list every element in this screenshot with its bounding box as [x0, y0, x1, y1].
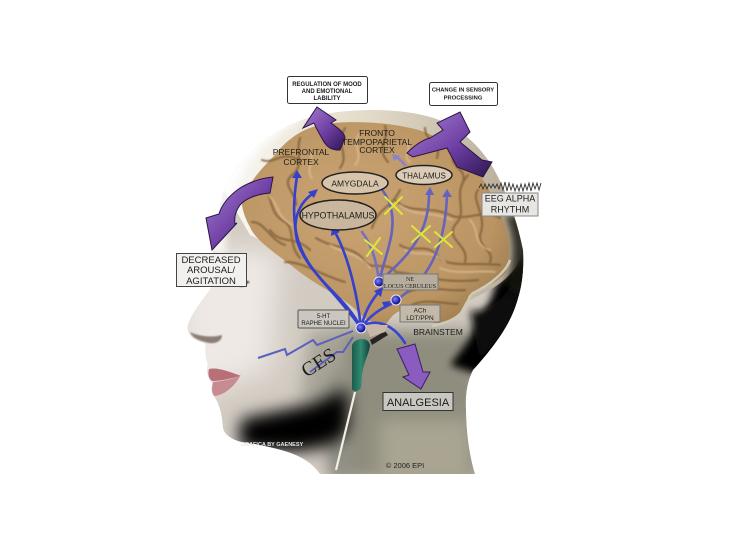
box: 5-HT raphe nuclei: 5-HT [317, 314, 330, 320]
label: prefrontal cortex: PREFRONTAL [273, 147, 330, 157]
brain folds [252, 126, 500, 305]
box: regulation of mood: REGULATION OF MOOD [292, 82, 362, 88]
purple arrow: mood regulation [303, 107, 345, 150]
box: NE locus coeruleus: NE [406, 277, 414, 283]
purple arrow: decreased arousal [206, 177, 273, 250]
blue pathway arrows [294, 156, 447, 343]
box: analgesia [383, 392, 453, 410]
hub dot: LDT/PPN [391, 295, 401, 305]
electrode and wire [336, 325, 388, 470]
box: change in sensory processing: CHANGE IN SENSORY [432, 88, 494, 94]
ellipse: amygdala: AMYGDALA [331, 178, 379, 188]
blue arrowheads [292, 154, 452, 309]
label: CES: CES [297, 344, 340, 382]
purple arrow: analgesia [397, 344, 430, 389]
box: change in sensory processing: PROCESSING [444, 96, 483, 102]
label: fronto temporoparietal cortex: TEMPOPARIETAL [342, 137, 412, 147]
box: EEG alpha rhythm: EEG ALPHA [485, 194, 535, 204]
box: analgesia: ANALGESIA [387, 397, 450, 409]
box: decreased arousal [176, 254, 246, 287]
credit: copyright: © 2006 EPI [386, 461, 424, 470]
brainstem outline [432, 260, 510, 326]
box: NE locus coeruleus: LOCUS CERULEUS [384, 284, 436, 290]
box: ACh LDT/PPN: ACh [414, 308, 427, 314]
hub dot: locus coeruleus [374, 277, 384, 287]
ellipse: hypothalamus [300, 200, 376, 230]
lightning bolts: CES current [258, 331, 353, 372]
box: decreased arousal: AROUSAL/ [187, 265, 235, 276]
box: regulation of mood: LABILITY [314, 96, 340, 102]
label: brainstem: BRAINSTEM [413, 327, 463, 337]
box: EEG alpha rhythm [482, 193, 538, 216]
box: decreased arousal: DECREASED [181, 255, 241, 266]
box: NE locus coeruleus [383, 274, 438, 290]
head: face, neck and skull [180, 100, 530, 485]
label: fronto temporoparietal cortex: FRONTO [359, 128, 395, 138]
label: fronto temporoparietal cortex: CORTEX [359, 145, 395, 155]
EEG alpha wave [479, 182, 541, 191]
ellipse: amygdala [322, 172, 388, 194]
ellipse: hypothalamus: HYPOTHALAMUS [302, 210, 375, 220]
hub dot: raphe [356, 323, 366, 333]
ellipse: thalamus [396, 166, 452, 184]
box: decreased arousal: AGITATION [186, 276, 236, 287]
face features: eye, nose shadow and lips [190, 277, 250, 396]
brain [242, 122, 509, 326]
purple arrow: sensory processing forked [407, 112, 492, 177]
box: regulation of mood: AND EMOTIONAL [302, 89, 353, 95]
box: EEG alpha rhythm: RHYTHM [491, 204, 529, 214]
box: change in sensory processing [430, 82, 498, 106]
yellow X marks [365, 197, 452, 256]
ellipse: thalamus: THALAMUS [402, 172, 446, 180]
box: 5-HT raphe nuclei: RAPHE NUCLEI [301, 321, 346, 327]
box: ACh LDT/PPN [400, 305, 440, 322]
box: 5-HT raphe nuclei [298, 310, 349, 328]
box: ACh LDT/PPN: LDT/PPN [406, 315, 434, 322]
credit: graphic by: GRAFICA BY GAENESY [241, 442, 304, 448]
label: prefrontal cortex: CORTEX [283, 157, 319, 167]
box: regulation of mood [288, 76, 368, 104]
